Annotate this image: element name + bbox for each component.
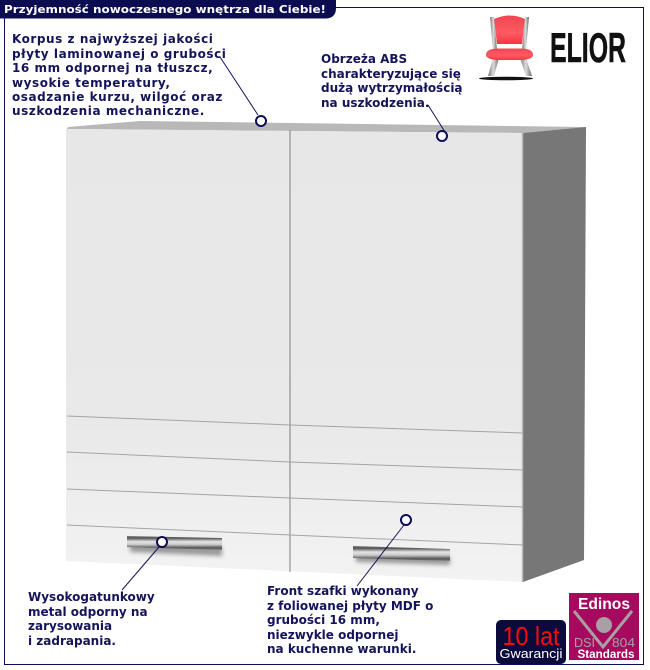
text: korpus: Korpus z najwyższej jakości xyxy=(12,32,213,46)
cabinet top xyxy=(67,121,587,133)
badge: warranty xyxy=(496,620,566,664)
marker: handle xyxy=(157,537,167,547)
leader: handle xyxy=(122,547,159,590)
text: front: z foliowanej płyty MDF o xyxy=(267,599,433,613)
door divider xyxy=(289,130,291,572)
icon: chair xyxy=(479,16,533,80)
text: handle: zarysowania xyxy=(28,619,112,633)
text: korpus: uszkodzenia mechaniczne. xyxy=(12,104,205,118)
text: ABS: Obrzeża ABS xyxy=(321,52,407,66)
badge: Edinos standards: DSI xyxy=(574,635,595,650)
marker: ABS xyxy=(437,131,447,141)
text: handle: Wysokogatunkowy xyxy=(28,590,155,604)
header tab xyxy=(0,0,336,18)
text: handle: i zadrapania. xyxy=(28,634,116,648)
text: korpus: płyty laminowanej o grubości xyxy=(12,47,226,61)
text: korpus: 16 mm odpornej na tłuszcz, xyxy=(12,61,213,75)
right handle xyxy=(353,546,450,565)
cabinet xyxy=(66,121,587,582)
badge: warranty: Gwarancji xyxy=(500,647,562,661)
text: front: grubości 16 mm, xyxy=(267,613,380,627)
text: korpus: osadzanie kurzu, wilgoć oraz xyxy=(12,90,223,104)
text: front: niezwykle odpornej xyxy=(267,628,398,642)
cabinet side xyxy=(523,127,586,582)
header tab: Przyjemność nowoczesnego wnętrza dla Ciebie! xyxy=(4,3,326,16)
text: korpus: wysokie temperatury, xyxy=(12,76,170,90)
marker: front xyxy=(401,515,411,525)
cabinet front xyxy=(66,129,523,582)
marker: korpus xyxy=(256,116,266,126)
leader: ABS xyxy=(428,105,445,132)
badge: Edinos standards xyxy=(569,593,639,661)
leader: front xyxy=(357,525,404,586)
badge: Edinos standards: Standards xyxy=(578,649,634,661)
text: ABS: na uszkodzenia. xyxy=(321,96,429,110)
badge: warranty: 10 lat xyxy=(502,621,560,651)
badge: Edinos standards: 804 xyxy=(612,635,635,650)
text: ABS: charakteryzujące się xyxy=(321,67,461,81)
text: handle: metal odporny na xyxy=(28,605,148,619)
text: ABS: dużą wytrzymałością xyxy=(321,81,463,95)
leader: korpus xyxy=(220,57,258,115)
text: front: na kuchenne warunki. xyxy=(267,642,416,656)
text: front: Front szafki wykonany xyxy=(267,584,419,598)
badge: Edinos standards: Edinos xyxy=(578,596,630,613)
left handle xyxy=(127,536,222,556)
